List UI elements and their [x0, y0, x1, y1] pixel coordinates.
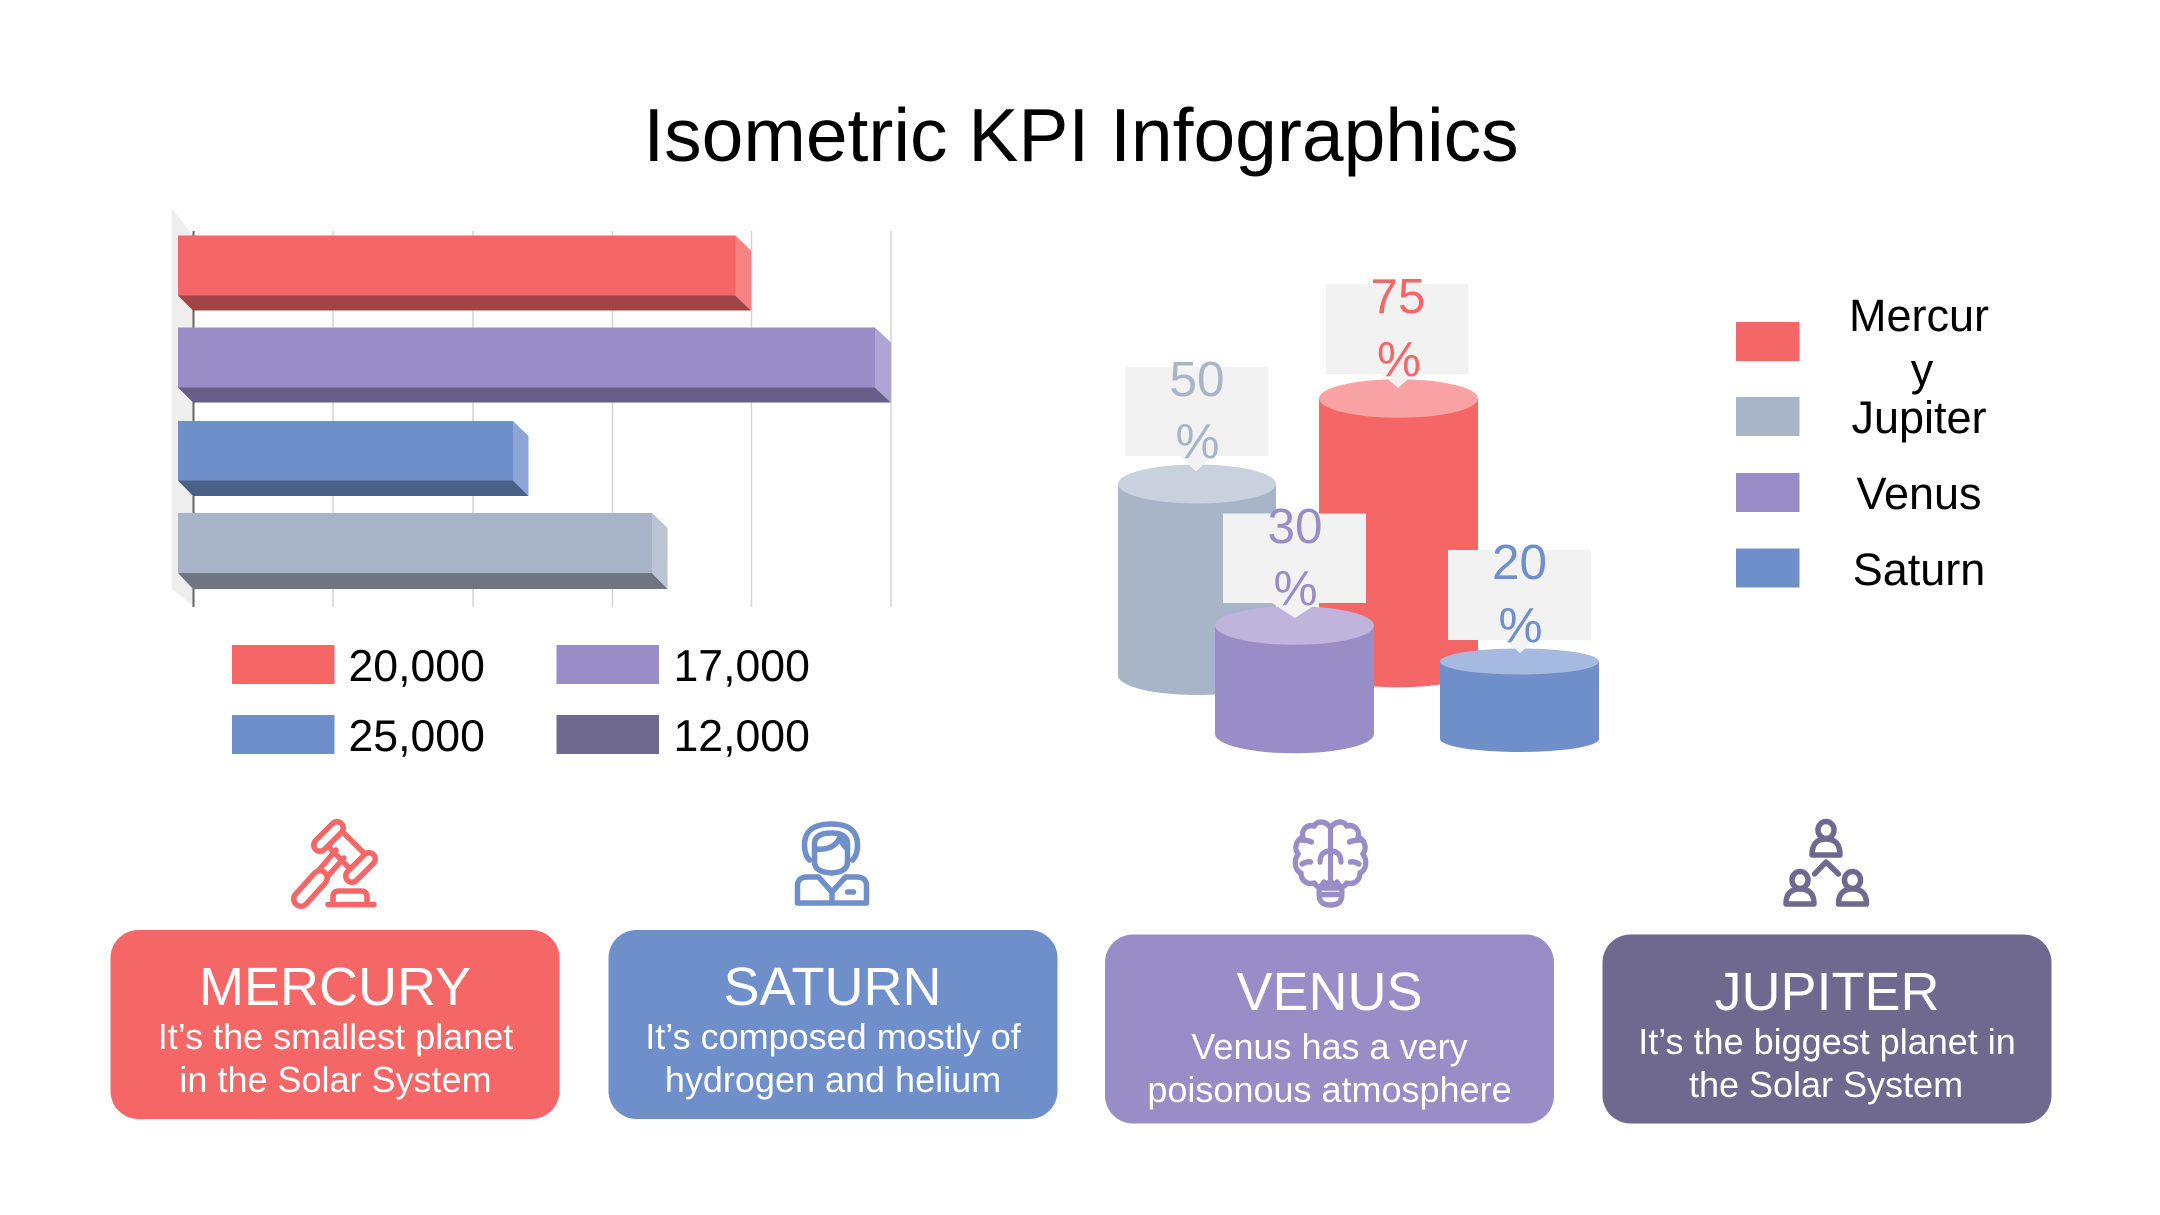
- card: Venus: Venus has a very: [1191, 1026, 1468, 1067]
- bar: Jupiter: [178, 513, 668, 589]
- icon: person with headset: [798, 824, 866, 903]
- icon: gavel: [301, 828, 374, 904]
- cylinder chart legend: y: [1911, 344, 1934, 395]
- icon: three people hierarchy: [1786, 822, 1866, 904]
- card: Jupiter: the Solar System: [1689, 1064, 1963, 1105]
- cylinder: Venus 30%: [1215, 499, 1374, 753]
- bar: Venus: [178, 328, 891, 402]
- cylinder: Mercury 75%: 75: [1370, 269, 1426, 324]
- card: Jupiter: It’s the biggest planet in: [1638, 1021, 2016, 1062]
- bar chart legend: 25,000: [348, 712, 485, 761]
- cylinder: Venus 30%: %: [1273, 561, 1318, 616]
- bar chart legend: [232, 642, 810, 761]
- arrow: chevron: [1814, 862, 1838, 874]
- cylinder: Mercury 75%: %: [1377, 332, 1421, 387]
- cylinder: Jupiter 50%: %: [1175, 414, 1220, 469]
- cylinder chart legend: Mercur: [1849, 290, 1989, 341]
- bar chart legend: 17,000: [674, 642, 810, 691]
- card: Mercury: [110, 930, 560, 1119]
- bar chart legend: 12,000: [674, 712, 810, 761]
- card: Saturn: hydrogen and helium: [665, 1059, 1001, 1100]
- card: Saturn: [608, 930, 1058, 1119]
- cylinder: Jupiter 50%: 50: [1169, 352, 1225, 407]
- card: Saturn: It’s composed mostly of: [645, 1016, 1022, 1057]
- person: top: [1812, 822, 1840, 855]
- card: Venus: [1105, 934, 1554, 1124]
- person: right: [1838, 872, 1866, 904]
- card: Venus: VENUS: [1236, 962, 1423, 1022]
- cylinder chart legend: Jupiter: [1851, 392, 1987, 443]
- cylinder: Saturn 20%: %: [1498, 598, 1543, 653]
- card: Mercury: It’s the smallest planet: [158, 1016, 513, 1057]
- person: left: [1786, 872, 1814, 904]
- cylinder: Venus 30%: 30: [1267, 499, 1323, 554]
- card: Jupiter: [1602, 934, 2052, 1124]
- card: Mercury: MERCURY: [199, 957, 471, 1017]
- cylinder chart legend: [1736, 290, 1989, 595]
- cylinder: Mercury 75%: [1319, 269, 1478, 687]
- cylinder chart legend: Saturn: [1853, 544, 1985, 595]
- bar chart: [172, 209, 891, 607]
- cylinder chart: [1118, 269, 1599, 753]
- bar: Mercury: [178, 236, 751, 310]
- cylinder: Saturn 20%: 20: [1492, 535, 1547, 590]
- cylinder: Jupiter 50%: [1118, 352, 1276, 695]
- cylinder: Saturn 20%: [1440, 535, 1599, 752]
- cylinder chart legend: Venus: [1856, 468, 1982, 519]
- card: Venus: poisonous atmosphere: [1147, 1069, 1512, 1110]
- card: Jupiter: JUPITER: [1714, 962, 1940, 1022]
- bar: Saturn: [178, 421, 528, 496]
- card: Mercury: in the Solar System: [179, 1059, 492, 1100]
- title: Isometric KPI Infographics: [643, 93, 1519, 177]
- icon: brain with bulb: [1295, 822, 1366, 905]
- bar chart legend: 20,000: [348, 642, 485, 691]
- card: Saturn: SATURN: [723, 957, 942, 1017]
